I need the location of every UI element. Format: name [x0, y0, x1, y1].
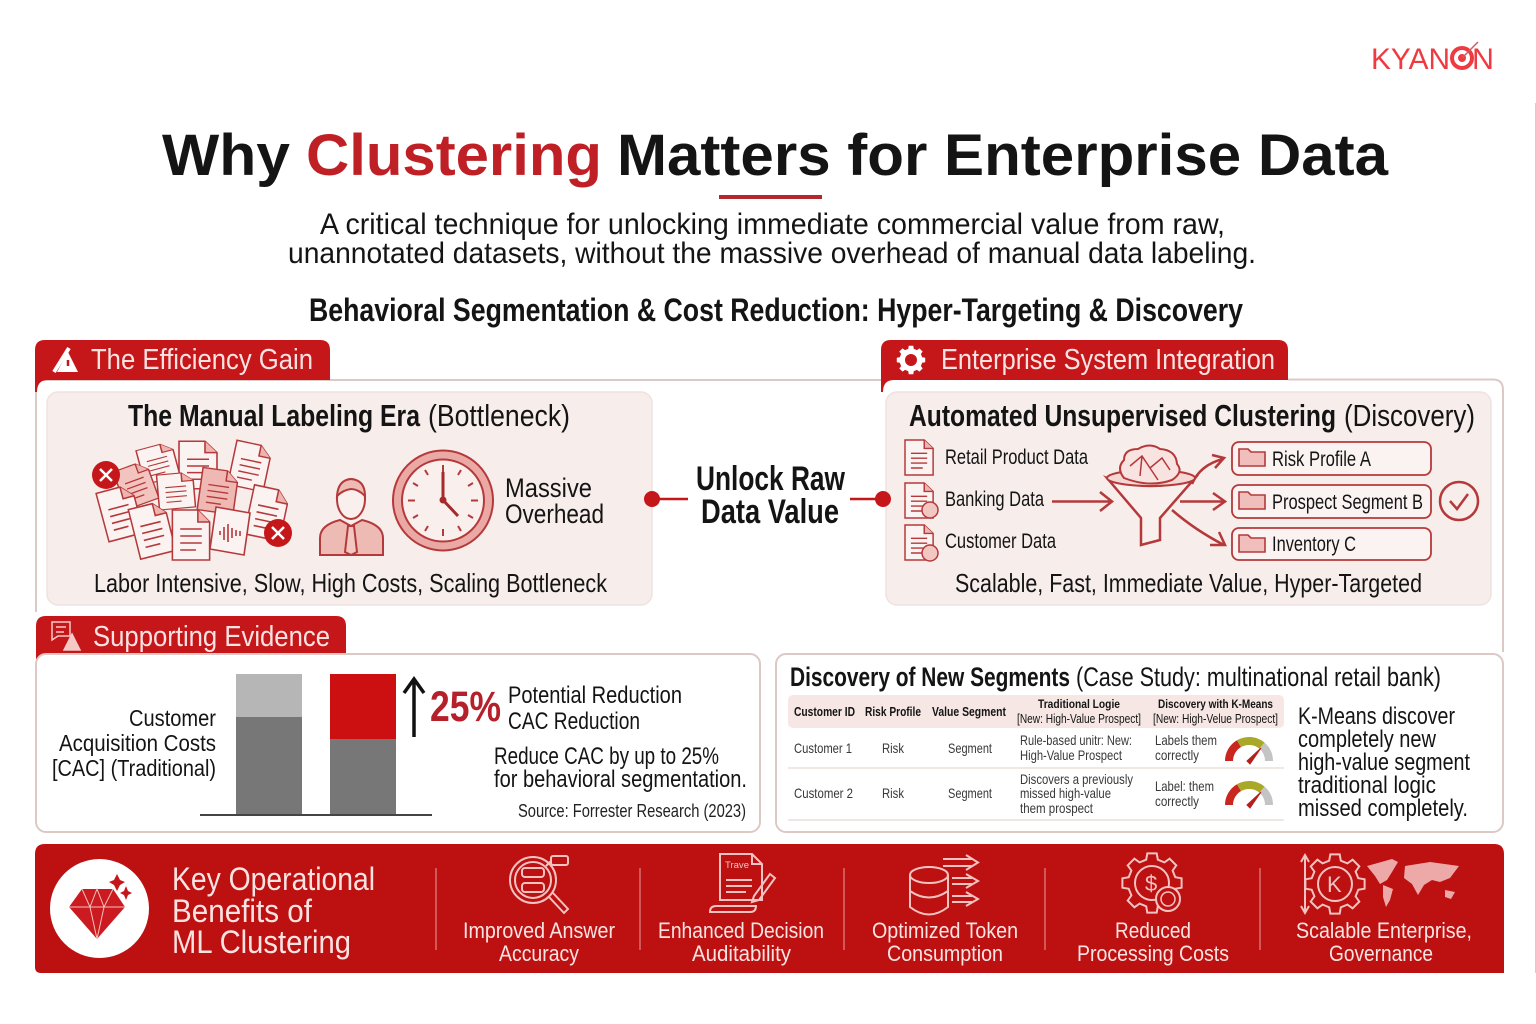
logo: Kyanon: KYAN [1371, 43, 1450, 76]
bar chart [200, 674, 432, 816]
output: prospect segment B [1232, 485, 1431, 518]
bar heading: ML Clustering [172, 924, 351, 960]
arrow into funnel [1052, 492, 1112, 511]
gauge 2 [1229, 785, 1269, 808]
label: massive overhead: Massive [505, 473, 592, 503]
takeaway text [1298, 703, 1470, 822]
icon: brain funnel [1107, 446, 1195, 545]
table row 2: Discovers a previously [1020, 771, 1133, 787]
title: Why [162, 123, 290, 188]
tab: Enterprise System Integration: Enterprise System Integration [941, 344, 1275, 376]
table row 2: Risk [882, 785, 905, 801]
tab: The Efficiency Gain [35, 340, 330, 392]
chart label [52, 705, 216, 781]
logo: Kyanon: N [1472, 43, 1494, 76]
stat: 25%: 25% [430, 683, 501, 731]
panel heading: The Manual Labeling Era [128, 398, 421, 433]
chart label: Acquisition Costs [59, 730, 216, 756]
description: Reduce CAC by up to 25% [494, 743, 719, 770]
table row 1: High-Value Prospect [1020, 747, 1122, 763]
table header: Traditional Logie [1038, 697, 1120, 711]
stat label: CAC Reduction [508, 708, 640, 735]
benefit: optimized token consumption: Consumption [887, 941, 1003, 966]
table row 1: correctly [1155, 747, 1199, 763]
panel heading: (Discovery) [1344, 398, 1475, 433]
table row 1: Rule-based unitr: New: [1020, 732, 1132, 748]
benefit: improved answer accuracy [463, 856, 615, 966]
top frame lines [36, 380, 1503, 652]
label: banking: Banking Data [945, 488, 1044, 511]
subtitle: unannotated datasets, without the massive overhead of manual data labeling. [288, 237, 1256, 270]
table row 1 [794, 732, 1217, 763]
benefit: enhanced decision auditability: Enhanced Decision [658, 918, 824, 943]
output: risk profile A: Risk Profile A [1272, 448, 1371, 471]
tab: Enterprise System Integration [881, 340, 1288, 392]
title underline [719, 195, 822, 199]
panel heading: (Bottleneck) [428, 398, 570, 433]
icon: magnifier [510, 856, 568, 913]
icon: ruby badge [50, 859, 149, 958]
benefit: optimized token consumption: Optimized Token [872, 918, 1018, 943]
label: customer: Customer Data [945, 530, 1056, 553]
table header: Risk Profile [865, 705, 921, 719]
benefit: reduced processing costs [1077, 853, 1229, 966]
source: Source: Forrester Research (2023) [518, 801, 746, 821]
table row 2: them prospect [1020, 800, 1093, 816]
icon: customer document [905, 525, 938, 561]
connector left [644, 491, 688, 507]
stat label: Potential Reduction [508, 682, 682, 709]
panel: discovery of new segments [776, 654, 1503, 832]
icon: gear with coin: $ [1145, 871, 1157, 896]
icon: database with arrows [910, 855, 978, 914]
takeaway text: high-value segment [1298, 749, 1470, 776]
icon: banking document [905, 483, 938, 518]
table [788, 695, 1284, 820]
output: prospect segment B: Prospect Segment B [1272, 491, 1423, 514]
icon: gear [897, 346, 925, 374]
benefit: scalable enterprise governance: Governance [1329, 941, 1433, 966]
bar heading [172, 861, 375, 960]
takeaway text: K-Means discover [1298, 703, 1455, 730]
panel heading: Discovery of New Segments [790, 662, 1070, 692]
icon: K gear [1301, 854, 1365, 914]
benefits bar [35, 844, 1504, 973]
table row 2: correctly [1155, 793, 1199, 809]
icon: error mark right [264, 519, 292, 547]
description: for behavioral segmentation. [494, 766, 747, 793]
table row 1: Labels them [1155, 732, 1217, 748]
benefit: reduced processing costs: Reduced [1115, 918, 1191, 943]
benefit: improved answer accuracy: Improved Answer [463, 918, 615, 943]
icon: document pile [96, 440, 290, 560]
table row 2: Customer 2 [794, 785, 853, 801]
callout: unlock raw data value: Unlock Raw [696, 460, 845, 498]
callout: unlock raw data value [696, 460, 845, 531]
table header: Discovery with K-Means [1158, 697, 1273, 711]
table row 2: Segment [948, 785, 992, 801]
icon: clock [393, 450, 493, 550]
icon: world map [1367, 859, 1459, 907]
benefit: scalable enterprise governance [1296, 854, 1472, 966]
tab: The Efficiency Gain: The Efficiency Gain [91, 344, 313, 376]
caption: Scalable, Fast, Immediate Value, Hyper-Targeted [955, 568, 1422, 598]
icon: evidence [52, 622, 80, 650]
tab: Supporting Evidence [36, 616, 346, 664]
takeaway text: traditional logic [1298, 772, 1436, 799]
table row 2 [794, 771, 1214, 816]
benefit: enhanced decision auditability: Auditability [692, 941, 791, 966]
table row 1: Customer 1 [794, 740, 852, 756]
benefit: optimized token consumption [872, 855, 1018, 966]
benefit: improved answer accuracy: Accuracy [499, 941, 579, 966]
bar heading: Key Operational [172, 861, 375, 897]
table header: [New: High-Velue Prospect] [1153, 712, 1278, 726]
connector right [850, 491, 891, 507]
callout: unlock raw data value: Data Value [701, 493, 839, 531]
icon: warning tools [54, 348, 78, 372]
table row 1: Segment [948, 740, 992, 756]
table header: Value Segment [932, 705, 1007, 719]
icon: signed document [710, 854, 775, 912]
benefit: enhanced decision auditability [658, 854, 824, 966]
panel heading: Automated Unsupervised Clustering [909, 398, 1336, 433]
panel heading: (Case Study: multinational retail bank) [1076, 662, 1441, 692]
bar heading: Benefits of [172, 893, 312, 929]
output: inventory C [1232, 528, 1431, 560]
table row 2: Label: them [1155, 778, 1214, 794]
gauge 1 [1229, 741, 1269, 764]
benefit: scalable enterprise governance: K [1327, 872, 1342, 897]
label: massive overhead: Overhead [505, 499, 604, 529]
benefit: enhanced decision auditability: Trave [725, 860, 749, 870]
stat label [508, 682, 682, 735]
chart label: [CAC] (Traditional) [52, 755, 216, 781]
icon: person [320, 479, 383, 555]
section heading: Behavioral Segmentation & Cost Reduction: Hyper-Targeting & Discovery [309, 292, 1243, 328]
table row 1: Risk [882, 740, 905, 756]
icon: error mark left [92, 461, 120, 489]
table row 2: missed high-value [1020, 785, 1111, 801]
subtitle [288, 208, 1256, 270]
arrow up [404, 679, 424, 737]
benefit: scalable enterprise governance: Scalable Enterprise, [1296, 918, 1472, 943]
subtitle: A critical technique for unlocking immediate commercial value from raw, [320, 208, 1225, 241]
description [494, 743, 747, 793]
title: Matters for Enterprise Data [617, 123, 1389, 188]
benefit: reduced processing costs: Processing Costs [1077, 941, 1229, 966]
tab: Supporting Evidence: Supporting Evidence [93, 621, 330, 653]
output: risk profile A [1232, 442, 1431, 475]
table header: Customer ID [794, 705, 855, 719]
page edge line [1534, 103, 1536, 973]
panel: automated clustering [886, 392, 1491, 605]
output arrows [1172, 455, 1225, 545]
table header: [New: High-Value Prospect] [1017, 712, 1141, 726]
panel: manual labeling era [47, 392, 652, 605]
caption: Labor Intensive, Slow, High Costs, Scaling Bottleneck [94, 568, 608, 598]
output: inventory C: Inventory C [1272, 533, 1356, 556]
label: retail: Retail Product Data [945, 446, 1088, 469]
logo: Kyanon [1371, 42, 1494, 76]
panel: CAC chart [36, 654, 760, 832]
panel heading [790, 662, 1441, 692]
table header [788, 695, 1284, 728]
label: massive overhead [505, 473, 604, 529]
icon: check circle [1440, 482, 1478, 520]
title [162, 123, 1389, 188]
icon: retail document [905, 440, 933, 475]
takeaway text: missed completely. [1298, 795, 1468, 822]
icon: gear with coin [1122, 853, 1182, 913]
takeaway text: completely new [1298, 726, 1437, 753]
chart label: Customer [129, 705, 216, 731]
title: Clustering [306, 123, 602, 188]
